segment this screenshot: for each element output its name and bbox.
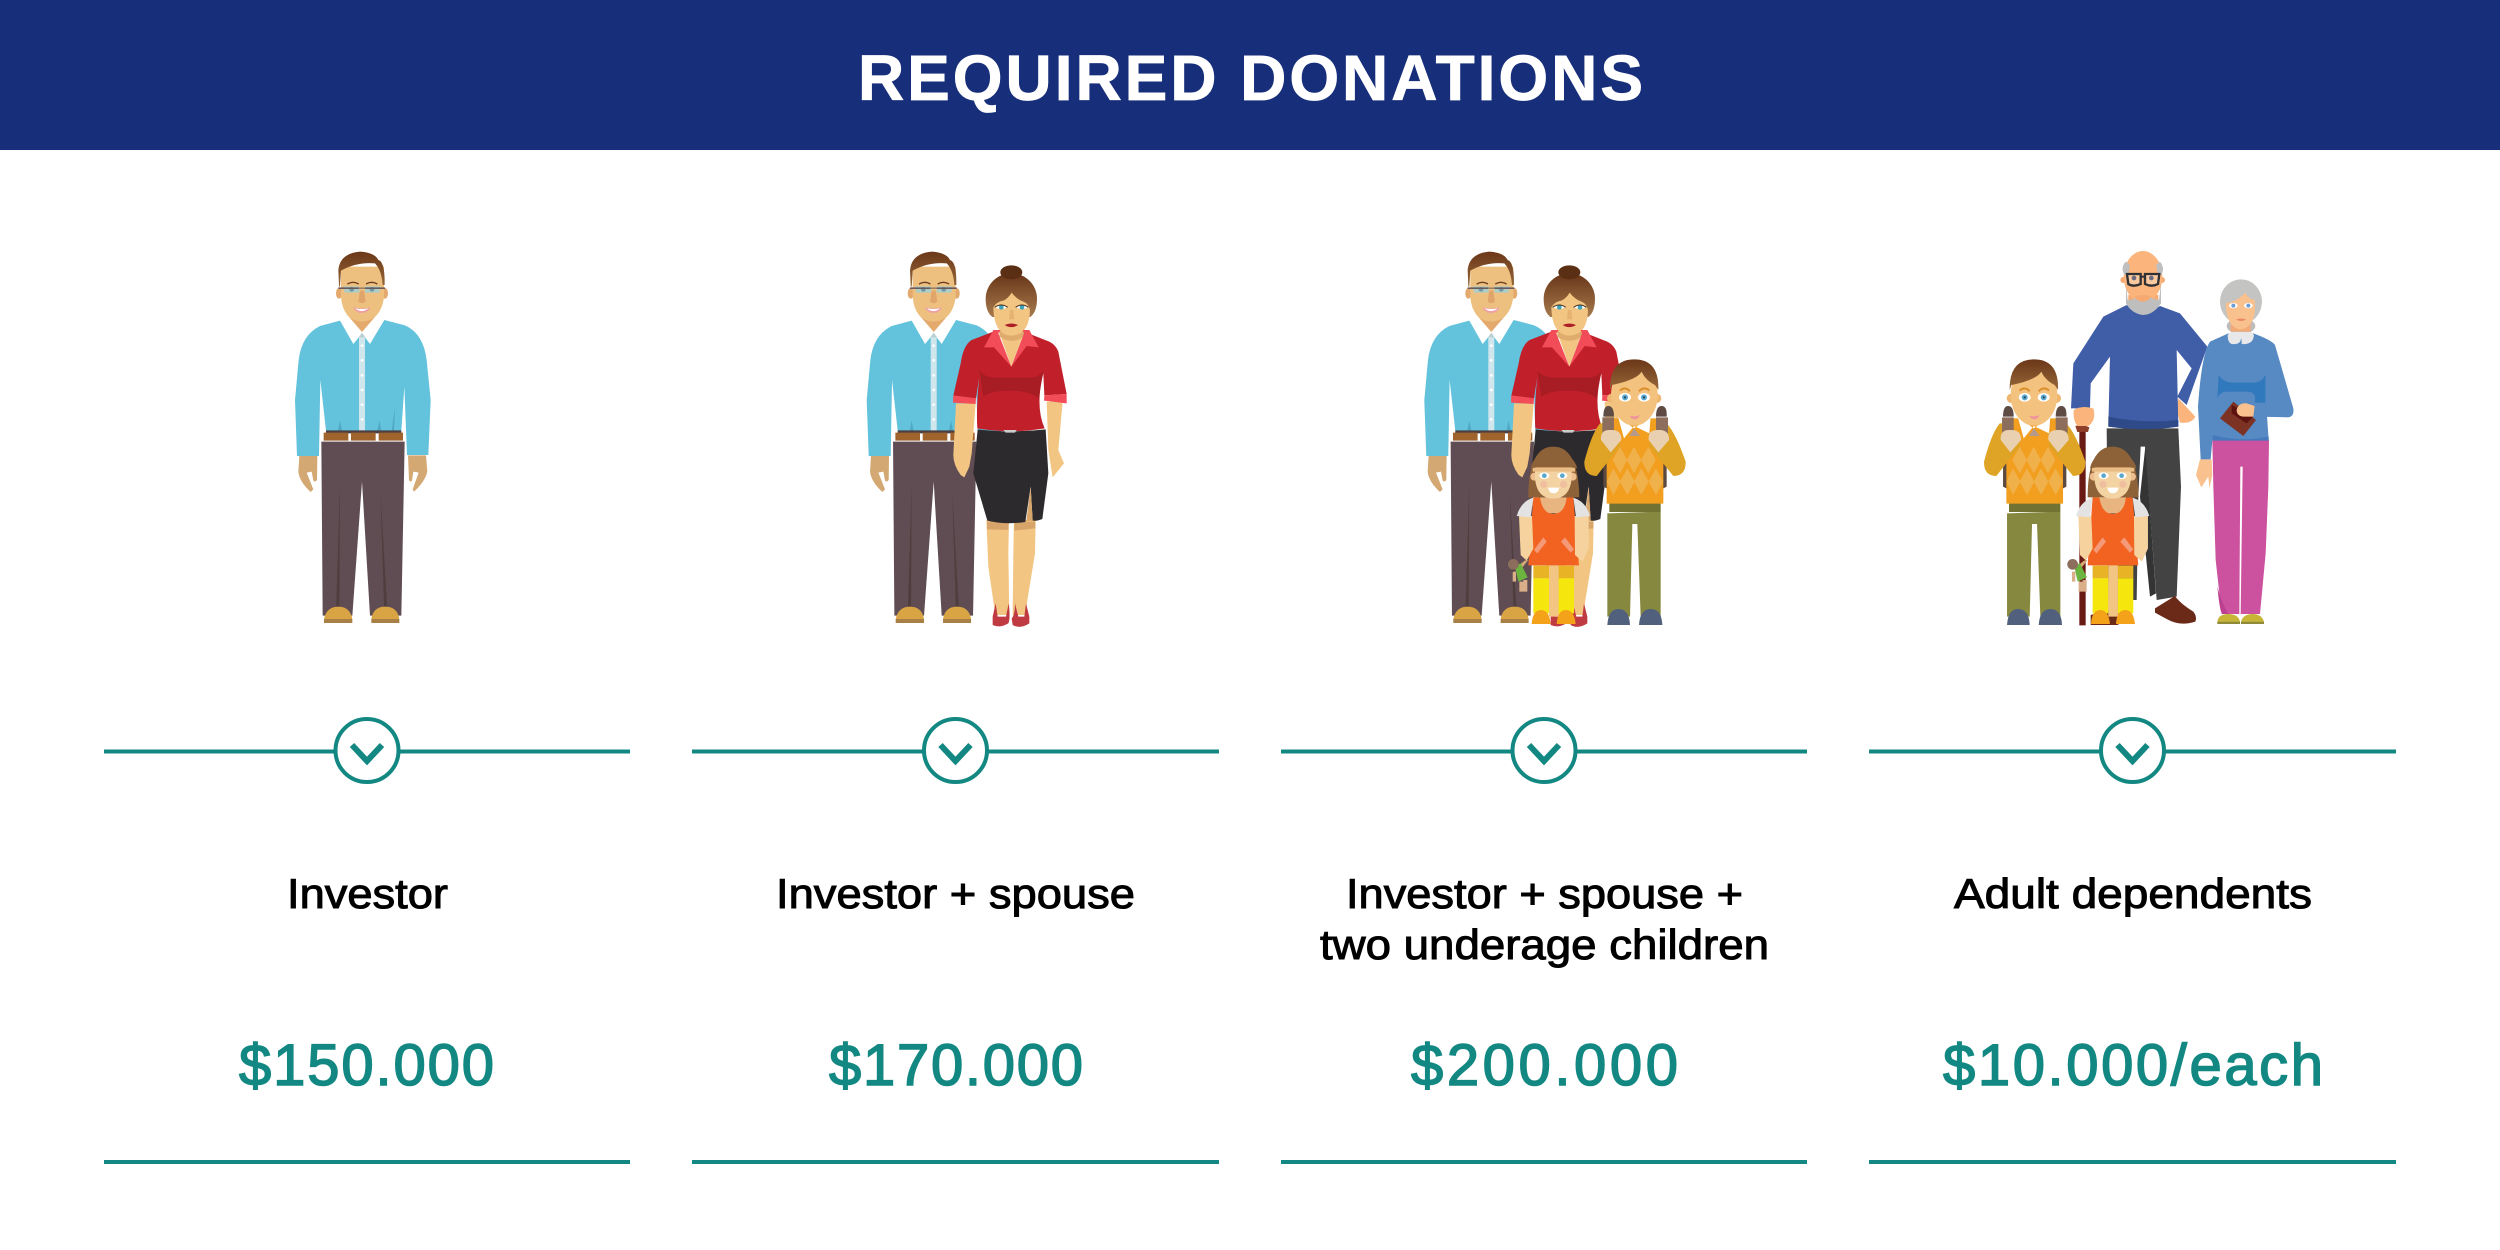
illustration: investor, spouse and two children — [1424, 252, 1686, 627]
label: investor plus spouse plus two children: two underage children — [1320, 921, 1769, 968]
illustration: adult dependents — [1984, 251, 2293, 625]
figure: girl — [1508, 447, 1590, 624]
label: investor: Investor — [287, 870, 448, 917]
bottom rule: column 2 — [692, 1160, 1219, 1164]
figure: grandmother — [2196, 279, 2293, 624]
illustration: investor and spouse — [867, 252, 1067, 627]
divider with chevron: column 1 — [104, 719, 630, 782]
figure: grandfather — [2071, 251, 2207, 625]
figure: man — [867, 252, 1002, 623]
label: investor plus spouse plus two children — [1320, 870, 1769, 968]
label: investor plus spouse plus two children: Investor + spouse + — [1346, 870, 1743, 917]
divider with chevron: column 4 — [1869, 719, 2396, 782]
illustration: investor — [295, 252, 431, 623]
bottom rule: column 3 — [1281, 1160, 1807, 1164]
price: investor plus spouse: $170.000 — [829, 1033, 1083, 1098]
label: adult dependents: Adult dependents — [1954, 870, 2312, 917]
figure: woman — [953, 265, 1067, 627]
figure: boy — [1584, 359, 1686, 625]
divider with chevron: column 2 — [692, 719, 1219, 782]
price: adult dependents: $10.000/each — [1943, 1033, 2323, 1098]
bottom rule: column 1 — [104, 1160, 630, 1164]
figure: man — [1424, 252, 1560, 623]
price: investor: $150.000 — [239, 1033, 494, 1098]
label: investor plus spouse: Investor + spouse — [776, 870, 1135, 917]
figure: woman — [1511, 265, 1625, 627]
price: family: $200.000 — [1411, 1033, 1678, 1098]
header banner — [0, 0, 2500, 150]
divider with chevron: column 3 — [1281, 719, 1807, 782]
title: REQUIRED DONATIONS — [858, 42, 1643, 114]
figure: boy — [1984, 359, 2085, 625]
bottom rule: column 4 — [1869, 1160, 2396, 1164]
figure: girl — [2067, 447, 2149, 624]
